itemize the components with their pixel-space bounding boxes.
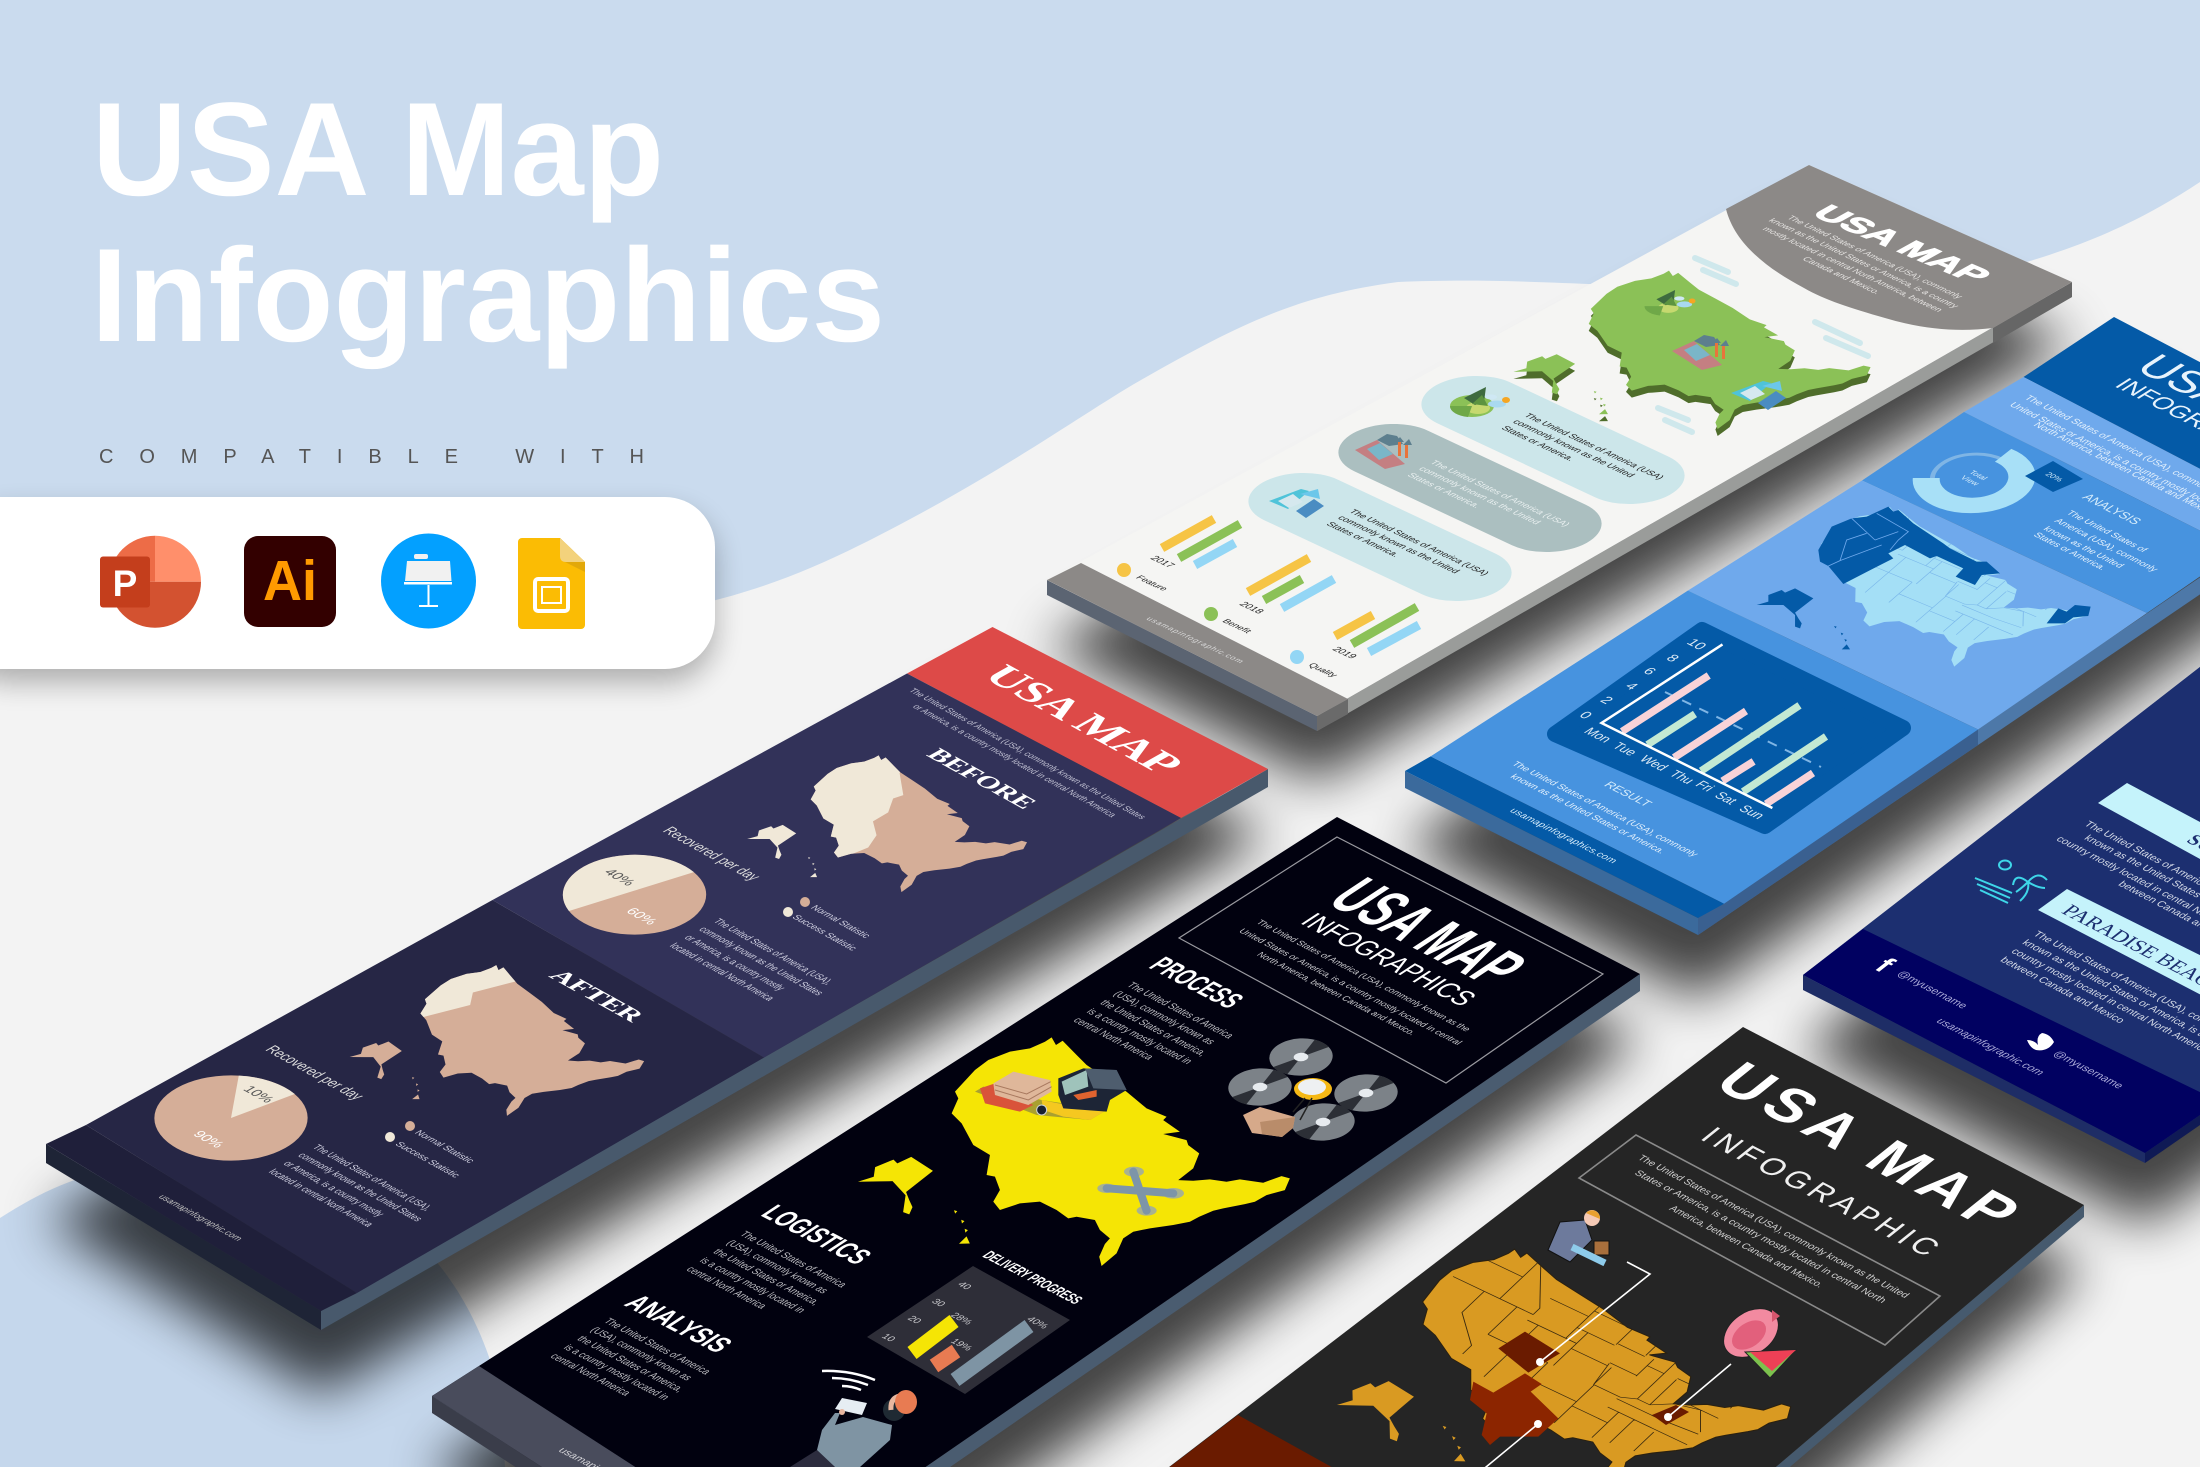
legend [1117, 563, 1340, 679]
year labels: 2018 [1236, 601, 1266, 616]
after heading: AFTER [543, 966, 650, 1026]
before legend: Success Statistic [789, 914, 859, 952]
x axis labels: Wed [1636, 753, 1672, 773]
card surface [1047, 165, 2072, 716]
after pie caption: Recovered per day [261, 1044, 367, 1102]
bar chart [1162, 519, 1419, 652]
x axis labels: Sun [1735, 803, 1769, 821]
after legend [385, 1121, 476, 1179]
process text: central North America [1070, 1016, 1156, 1062]
heading: USA MAP [1804, 201, 2000, 287]
icon: powerpoint: P [113, 563, 137, 604]
year labels: 2019 [1329, 646, 1359, 661]
y axis labels: 10 [1683, 636, 1711, 652]
dashed target line [1665, 692, 1821, 767]
heading: USA MAP [973, 659, 1193, 781]
analysis text: The United States of [2063, 509, 2150, 554]
intro text: America, between Canada and Mexico. [1666, 1204, 1826, 1290]
analysis text: (USA), commonly known as [587, 1325, 695, 1382]
y axis labels: 2 [1597, 694, 1617, 706]
heading: USA MAP [1702, 1052, 2034, 1240]
header shape [1726, 165, 2072, 330]
yellow USA map [780, 934, 1462, 1370]
pill 3 text: The United States of America (USA) [1347, 507, 1493, 576]
delivery chart: 28% [948, 1311, 975, 1327]
icon: fruit [1714, 1299, 1796, 1378]
map connector lines [1480, 1262, 1731, 1467]
panel shadow [0, 511, 715, 683]
delivery chart: 10 [878, 1332, 898, 1344]
map section [1688, 480, 2147, 730]
after legend: Normal Statistic [412, 1129, 476, 1165]
intro text: United States or America, is a country mostly located in central [1236, 927, 1464, 1047]
analysis text: The United States of America [601, 1317, 714, 1376]
after legend: Success Statistic [392, 1141, 462, 1179]
footer band [1047, 563, 1348, 716]
after pie labels: 10% [240, 1083, 278, 1105]
title: Infographics [91, 222, 885, 370]
intro strip [1964, 377, 2200, 550]
delivery chart title: DELIVERY PROGRESS [978, 1249, 1086, 1307]
delivery chart [867, 1266, 1070, 1394]
result heading: RESULT [1601, 779, 1656, 809]
sub heading: INFOGRAPHICS [1293, 909, 1483, 1011]
icon: worker with conveyor [1548, 1210, 1609, 1263]
analysis text: States or America. [2030, 531, 2109, 572]
header band [2024, 317, 2200, 516]
after pie labels: 90% [190, 1128, 228, 1150]
result text: The United States of America (USA), commonly [1509, 760, 1701, 858]
before legend: Normal Statistic [808, 904, 872, 940]
before text: or America, is a country mostly [681, 933, 788, 992]
chart axes [1602, 644, 1772, 808]
x axis labels: Fri [1692, 778, 1718, 794]
after map [350, 965, 644, 1116]
pill 3 [1227, 462, 1533, 612]
background wave: lower left blue [0, 1160, 505, 1467]
facebook handle: @myusername [1894, 969, 1970, 1011]
result section [1431, 590, 1978, 904]
legend: Quality [1306, 662, 1340, 679]
red header [907, 627, 1268, 818]
intro text: States or America, is a country mostly located in central North [1632, 1169, 1888, 1305]
before pie labels: 60% [623, 905, 661, 927]
pill 2 text: commonly known as the United [1417, 465, 1544, 525]
after text: commonly known as the United States [295, 1151, 425, 1223]
donut value tag [2025, 461, 2083, 492]
after pie labels [190, 1083, 278, 1150]
analysis heading: ANALYSIS [617, 1291, 739, 1357]
map connector dots [1534, 1358, 1672, 1428]
card surface [1803, 424, 2200, 1153]
intro text: or America, is a country mostly located in central North America [909, 703, 1119, 819]
intro text: The United States of America (USA), commonly [1785, 214, 1966, 300]
year labels: 2017 [1147, 555, 1177, 570]
card: black logistics poster [432, 817, 1640, 1467]
delivery chart: 40% [1024, 1315, 1051, 1331]
process text: (USA), commonly known as [1110, 989, 1218, 1046]
before text: The United States of America (USA), [711, 917, 836, 986]
x axis labels [1580, 725, 1769, 821]
pill icons [1269, 387, 1510, 518]
background wave: upper blue [0, 0, 2200, 604]
legend: Feature [1134, 574, 1170, 592]
title: USA Map [92, 76, 664, 224]
footer url: usamapinfographic.com [1144, 616, 1246, 664]
before pie labels: 40% [601, 866, 639, 888]
card side faces [46, 769, 1268, 1330]
card surface [432, 817, 1640, 1467]
chart bars [1622, 676, 1826, 804]
intro text: Canada and Mexico. [1800, 256, 1883, 295]
y axis labels: 0 [1576, 709, 1596, 721]
before pie caption: Recovered per day [659, 825, 763, 883]
intro text: The United States of America (USA), commonly known as the United States [906, 687, 1148, 821]
delivery chart: 19% [948, 1337, 975, 1353]
card surface [843, 1027, 2084, 1467]
year labels [1147, 555, 1359, 661]
after pie chart [123, 1058, 339, 1178]
icon: powerpoint [100, 536, 201, 628]
donut chart [1911, 442, 2042, 517]
header frame [1179, 837, 1603, 1083]
before section [492, 674, 1181, 1058]
card: dark navy poster [1803, 424, 2200, 1163]
process text: the United States or America, [1097, 998, 1210, 1058]
logistics text: The United States of America [737, 1230, 850, 1289]
pill 1 text: commonly known as the United [1511, 418, 1638, 478]
analysis section [1862, 412, 2200, 613]
footer url: usamapinfographic.com [1933, 1016, 2047, 1078]
intro text: The United States of America (USA), commonly known as the [1253, 918, 1473, 1034]
icon: facebook: f [1869, 953, 1902, 977]
logistics text: the United States or America, [710, 1247, 823, 1307]
y axis labels: 8 [1663, 652, 1683, 664]
intro frame [1579, 1135, 1940, 1345]
before heading: BEFORE [920, 745, 1042, 813]
logistics text: (USA), commonly known as [723, 1238, 831, 1295]
icon: forklift and pallet [975, 1068, 1127, 1120]
footer band [432, 1366, 787, 1467]
orange USA map [1337, 1248, 1792, 1467]
footer band [46, 1125, 357, 1311]
icon: palm beach [1975, 860, 2047, 903]
pill 2 [1317, 413, 1623, 563]
delivery chart: 40 [954, 1280, 974, 1292]
after text: or America, is a country mostly [280, 1159, 387, 1218]
card side face [1184, 1205, 2084, 1467]
intro text: known as the United States or America, is a country [1766, 217, 1962, 310]
twitter handle: @myusername [2050, 1049, 2126, 1091]
icon: delivery drone [1215, 1031, 1411, 1148]
pill 3 text: commonly known as the United [1336, 514, 1463, 574]
pill 2 text: The United States of America (USA) [1428, 458, 1574, 527]
before pie chart [533, 838, 736, 951]
chart panel [1555, 630, 1903, 826]
text block 2: between Canada and Mexico [1997, 955, 2127, 1026]
logistics text: is a country mostly located in [697, 1256, 808, 1315]
delivery chart: 20 [904, 1314, 924, 1326]
before pie labels [601, 866, 661, 927]
process text: The United States of America [1124, 981, 1237, 1040]
icon: person with tablet [790, 1371, 917, 1467]
decorative clouds [1658, 258, 1868, 432]
result text: known as the United States or America. [1508, 773, 1668, 855]
footer band [1405, 756, 1724, 918]
footer block [1100, 1415, 1400, 1467]
analysis text: the United States or America, [574, 1334, 687, 1394]
label bar 1 [2098, 783, 2200, 912]
y axis labels [1576, 636, 1711, 721]
title [91, 76, 885, 370]
donut chart: View [1958, 474, 1981, 487]
after text: located in central North America [266, 1167, 377, 1229]
analysis text: central North America [547, 1352, 633, 1398]
pill 1 text: States or America. [1499, 424, 1578, 462]
before text: located in central North America [667, 941, 778, 1003]
intro text: North America, between Canada and Mexico. [1254, 951, 1418, 1037]
pill 1 [1400, 365, 1706, 515]
icon: drone on map [1097, 1167, 1184, 1216]
x axis labels: Tue [1609, 740, 1641, 758]
card: blue poster [1405, 317, 2200, 935]
map icons [1644, 290, 1786, 410]
pill 2 text: States or America. [1405, 471, 1484, 509]
logistics text: central North America [683, 1265, 769, 1311]
icon: twitter [2027, 1033, 2054, 1050]
legend: Benefit [1220, 618, 1254, 635]
icon: keynote [381, 534, 476, 628]
analysis text: America (USA), commonly [2051, 517, 2161, 574]
after section [86, 900, 764, 1293]
before text: commonly known as the United States [696, 925, 826, 997]
icon: illustrator: Ai [263, 549, 317, 613]
card: dark grey poster [1169, 1027, 2084, 1467]
logistics heading: LOGISTICS [754, 1201, 878, 1269]
donut chart: Total [1967, 469, 1990, 482]
process text: is a country mostly located in [1084, 1007, 1195, 1066]
sub heading: INFOGRAPHIC [1694, 1123, 1946, 1261]
card: grey and green map poster [1047, 165, 2072, 731]
y axis labels: 4 [1622, 680, 1642, 692]
analysis text: known as the United [2040, 525, 2126, 570]
donut value tag: 20% [2043, 471, 2065, 483]
pill 3 text: States or America. [1324, 520, 1403, 558]
process heading: PROCESS [1142, 953, 1250, 1013]
panel: compatible apps [0, 497, 715, 669]
card: red and navy before after poster [46, 627, 1268, 1330]
blue USA map [1757, 506, 2091, 666]
before legend [783, 897, 872, 952]
intro text: mostly located in central North America, between [1760, 225, 1945, 313]
footer band [1803, 929, 2200, 1153]
icon: google slides [518, 538, 585, 629]
x axis labels: Thu [1666, 768, 1698, 786]
after text: The United States of America (USA), [310, 1143, 435, 1212]
pill 1 text: The United States of America (USA) [1522, 411, 1668, 480]
card side faces [1405, 456, 2200, 935]
card side faces [432, 974, 1640, 1467]
intro text: The United States of America (USA), commonly known as the United [1635, 1154, 1911, 1300]
card side faces [1047, 282, 2072, 731]
icon: illustrator [244, 536, 336, 627]
delivery chart: 30 [928, 1297, 948, 1309]
green USA map [1449, 199, 2011, 507]
compatible with label: COMPATIBLE WITH [99, 446, 644, 468]
x axis labels: Mon [1580, 725, 1616, 745]
before map [747, 755, 1027, 892]
footer url: usamapinfographics.com [1507, 807, 1619, 865]
analysis heading: ANALYSIS [2079, 491, 2145, 527]
heading: USA MAP [1313, 868, 1543, 996]
card side faces [1803, 663, 2200, 1163]
footer url: usamapinfographic.com [155, 1193, 245, 1243]
analysis text: is a country mostly located in [561, 1343, 672, 1402]
y axis labels: 6 [1640, 665, 1660, 677]
x axis labels: Sat [1711, 790, 1741, 807]
